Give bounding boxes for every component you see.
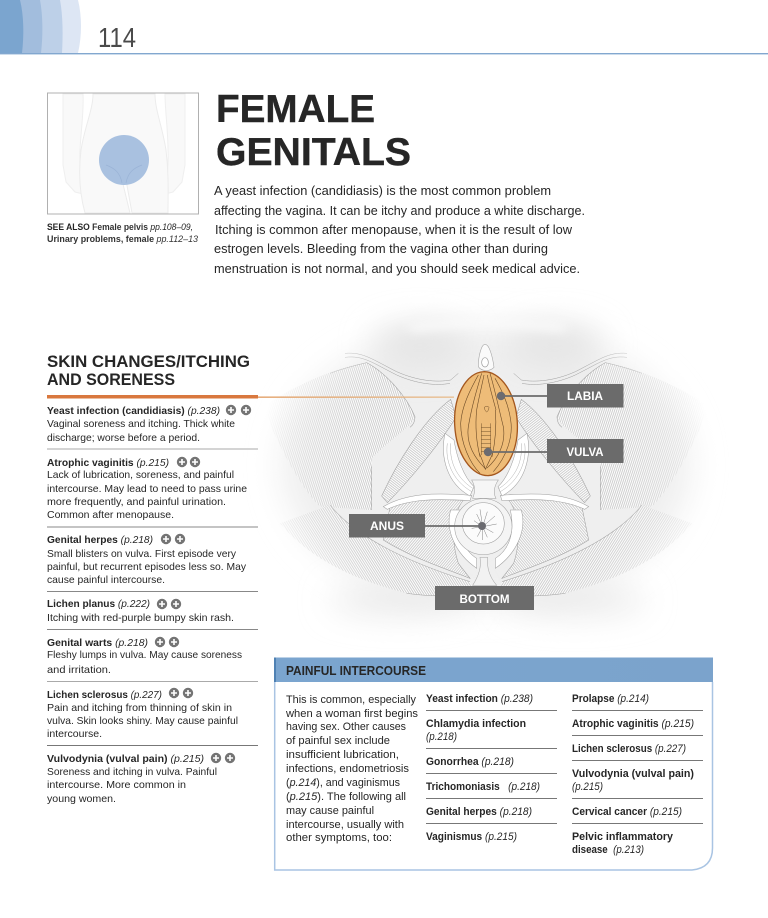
entry: atrophic vaginitis: Lack of lubrication, soreness, and painful	[47, 469, 234, 481]
panel list: column two: disease (p.213)	[572, 844, 644, 856]
panel list: column one: (p.218)	[426, 731, 457, 743]
entry: atrophic vaginitis	[47, 457, 258, 528]
heading: skin changes: AND SORENESS	[47, 371, 175, 389]
panel paragraph: having sex. Other causes	[286, 721, 406, 733]
entry: vulvodynia: intercourse. More common in	[47, 779, 186, 791]
heading: skin changes: SKIN CHANGES/ITCHING	[47, 353, 250, 371]
panel paragraph: insufficient lubrication,	[286, 749, 399, 761]
entry: yeast infection: discharge; worse before a period.	[47, 432, 200, 444]
callout: BOTTOM: BOTTOM	[460, 594, 510, 606]
panel list: column one: Gonorrhea (p.218)	[426, 756, 514, 768]
entry: vulvodynia: Soreness and itching in vulva. Painful	[47, 766, 217, 778]
entry: lichen sclerosus: Lichen sclerosus (p.227)	[47, 689, 162, 701]
intro paragraph: estrogen levels. Bleeding from the vagina other than during	[214, 241, 548, 256]
anal sphincter rings	[455, 499, 512, 555]
callout: BOTTOM	[435, 586, 534, 610]
entry: genital herpes	[47, 534, 258, 592]
intro paragraph: affecting the vagina. It can be itchy and produce a white discharge.	[214, 203, 585, 218]
panel paragraph: of painful sex include	[286, 735, 390, 747]
callout: ANUS: ANUS	[370, 521, 404, 533]
entry: atrophic vaginitis: Atrophic vaginitis (p.215)	[47, 457, 169, 469]
panel paragraph: (p.214), and vaginismus	[286, 777, 400, 789]
panel frame	[275, 682, 712, 870]
panel list: column one: Vaginismus (p.215)	[426, 831, 517, 843]
panel paragraph	[285, 694, 419, 844]
soft body shading	[281, 318, 691, 614]
orange leader bar	[47, 395, 454, 398]
panel header bar: PAINFUL INTERCOURSE	[286, 663, 426, 678]
see also caption	[47, 222, 198, 244]
entry: lichen sclerosus: intercourse.	[47, 728, 102, 740]
anatomical illustration	[263, 318, 709, 614]
intro paragraph: Itching is common after menopause, when it is the result of low	[215, 222, 572, 237]
entry: atrophic vaginitis: intercourse. May lead to need to pass urine	[47, 483, 247, 495]
orange highlighted vulva	[452, 370, 520, 477]
entry: genital herpes: Small blisters on vulva. First episode very	[47, 548, 237, 560]
panel list: column one: Genital herpes (p.218)	[426, 806, 532, 818]
panel paragraph: other symptoms, too:	[286, 832, 392, 844]
panel list: column one: Trichomoniasis (p.218)	[426, 781, 540, 793]
panel paragraph: intercourse, usually with	[286, 819, 404, 831]
page number: 114	[98, 22, 136, 53]
panel list: column two: Prolapse (p.214)	[572, 693, 649, 705]
entry: genital warts: Genital warts (p.218)	[47, 637, 148, 649]
entry: lichen sclerosus: Pain and itching from thinning of skin in	[47, 702, 232, 714]
panel paragraph: when a woman first begins	[285, 708, 419, 720]
panel list: column one: Yeast infection (p.238)	[426, 693, 533, 705]
callout: VULVA: VULVA	[566, 447, 604, 459]
panel list: column one: Chlamydia infection	[426, 718, 526, 730]
panel list: column two: Cervical cancer (p.215)	[572, 806, 682, 818]
entry: genital warts	[47, 637, 258, 682]
entry: genital herpes: painful, but recurrent episodes less so. May	[47, 561, 247, 573]
see also caption: SEE ALSO Female pelvis pp.108–09,	[47, 222, 193, 232]
title: GENITALS	[216, 131, 411, 174]
panel: painful intercourse	[274, 658, 713, 870]
panel paragraph: may cause painful	[286, 805, 374, 817]
highlighted circle	[99, 135, 149, 185]
heading: skin changes	[47, 353, 250, 389]
see also caption: Urinary problems, female pp.112–13	[47, 234, 198, 244]
perineal body	[472, 480, 498, 498]
clitoral hood	[478, 344, 494, 371]
panel paragraph: This is common, especially	[286, 694, 416, 706]
entry: atrophic vaginitis: Common after menopause.	[47, 509, 174, 521]
panel list: column two: Lichen sclerosus (p.227)	[572, 743, 686, 755]
intro paragraph: menstruation is not normal, and you should seek medical advice.	[214, 261, 580, 276]
panel list: column two: Vulvodynia (vulval pain)	[572, 768, 694, 780]
entry: yeast infection: Vaginal soreness and itching. Thick white	[47, 418, 235, 430]
entry: genital herpes: Genital herpes (p.218)	[47, 534, 153, 546]
entry: lichen planus	[47, 598, 258, 630]
entry: vulvodynia: Vulvodynia (vulval pain) (p.215)	[47, 753, 204, 765]
entry: yeast infection: Yeast infection (candidiasis) (p.238)	[47, 405, 220, 417]
muscles and pelvic floor linework	[263, 344, 709, 596]
panel header bar	[274, 658, 713, 682]
entry: genital warts: and irritation.	[47, 664, 111, 676]
callout: VULVA	[484, 439, 624, 463]
entry: lichen sclerosus	[47, 688, 258, 746]
intro paragraph	[214, 183, 585, 276]
entry: vulvodynia	[47, 753, 235, 805]
entry: vulvodynia: young women.	[47, 793, 116, 805]
panel list: column two: Atrophic vaginitis (p.215)	[572, 718, 694, 730]
panel paragraph: (p.215). The following all	[286, 791, 406, 803]
entry: lichen planus: Itching with red-purple bumpy skin rash.	[47, 612, 234, 624]
entry: atrophic vaginitis: more frequently, and painful urination.	[47, 496, 226, 508]
panel list: column two: Pelvic inflammatory	[572, 831, 673, 843]
entry: yeast infection	[47, 405, 258, 450]
callout: ANUS	[349, 514, 486, 538]
callout: LABIA	[497, 384, 624, 408]
symptom list	[47, 405, 258, 805]
callout: LABIA: LABIA	[567, 391, 603, 403]
entry: genital warts: Fleshy lumps in vulva. May cause soreness	[47, 649, 242, 661]
panel list: column two	[572, 693, 703, 856]
coccyx connection	[473, 557, 497, 585]
intro paragraph: A yeast infection (candidiasis) is the most common problem	[214, 183, 551, 198]
panel list: column two: (p.215)	[572, 781, 603, 793]
title	[216, 88, 411, 174]
title: FEMALE	[216, 88, 375, 131]
page header band	[0, 0, 768, 54]
entry: lichen sclerosus: vulva. Skin looks shiny. May cause painful	[47, 715, 238, 727]
locator thumbnail: body with highlighted pelvis	[48, 93, 198, 214]
panel paragraph: infections, endometriosis	[286, 763, 410, 775]
entry: lichen planus: Lichen planus (p.222)	[47, 598, 150, 610]
panel list: column one	[426, 693, 557, 843]
entry: genital herpes: cause painful intercourse.	[47, 574, 165, 586]
